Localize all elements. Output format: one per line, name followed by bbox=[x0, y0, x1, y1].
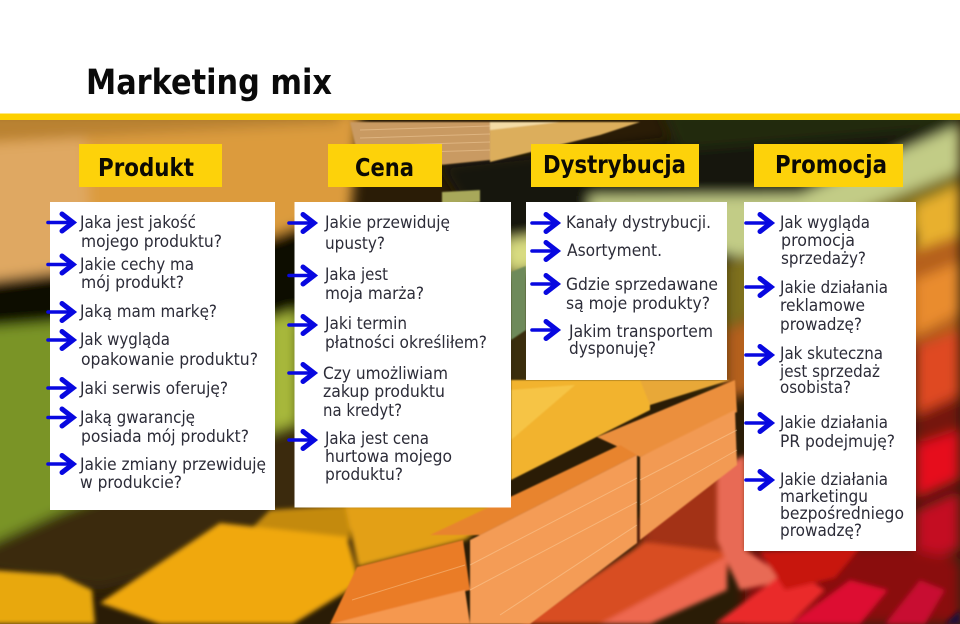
Promocja heading: Promocja bbox=[775, 150, 887, 179]
Dystrybucja question card bbox=[526, 202, 727, 380]
Dystrybucja arrows bbox=[532, 214, 557, 338]
Promocja questions: promocja bbox=[781, 231, 855, 251]
Dystrybucja questions: Gdzie sprzedawane bbox=[566, 275, 718, 295]
Dystrybucja questions bbox=[566, 213, 718, 359]
Cena questions: płatności określiłem? bbox=[325, 333, 487, 353]
Promocja questions: osobista? bbox=[780, 378, 851, 398]
Dystrybucja heading bbox=[531, 144, 699, 187]
Promocja questions bbox=[779, 213, 904, 541]
Promocja questions: Jakie działania bbox=[779, 278, 888, 298]
Produkt heading bbox=[79, 144, 222, 187]
Cena questions: Jakie przewiduję bbox=[324, 213, 450, 233]
Produkt questions: Jaki serwis oferuję? bbox=[79, 379, 228, 399]
Dystrybucja questions: są moje produkty? bbox=[566, 294, 710, 314]
Promocja questions: prowadzę? bbox=[780, 521, 862, 541]
panel: Dystrybucja bbox=[526, 144, 727, 380]
Promocja questions: jest sprzedaż bbox=[779, 362, 880, 382]
Cena questions: Czy umożliwiam bbox=[323, 364, 448, 384]
Promocja questions: Jak skuteczna bbox=[779, 344, 883, 364]
Produkt questions: Jakie cechy ma bbox=[79, 255, 194, 275]
Produkt question card bbox=[50, 202, 275, 510]
Promocja heading bbox=[754, 144, 903, 187]
Produkt questions: opakowanie produktu? bbox=[81, 350, 258, 370]
Dystrybucja questions: Kanały dystrybucji. bbox=[566, 213, 711, 233]
Promocja questions: sprzedaży? bbox=[781, 249, 866, 269]
Cena questions: Jaka jest cena bbox=[324, 429, 429, 449]
panel: Promocja bbox=[744, 144, 916, 551]
Dystrybucja questions: Asortyment. bbox=[567, 241, 662, 261]
top yellow rule bbox=[0, 114, 960, 120]
Produkt questions: Jaka jest jakość bbox=[79, 213, 196, 233]
Produkt questions: posiada mój produkt? bbox=[81, 427, 249, 447]
Dystrybucja questions: Jakim transportem bbox=[568, 322, 713, 342]
Produkt questions: mojego produktu? bbox=[81, 232, 222, 252]
Cena questions: na kredyt? bbox=[323, 401, 402, 421]
Promocja arrows bbox=[746, 214, 771, 488]
Promocja questions: reklamowe bbox=[780, 296, 865, 316]
Promocja questions: PR podejmuję? bbox=[780, 432, 895, 452]
Cena questions bbox=[323, 213, 487, 485]
Cena questions: zakup produktu bbox=[323, 382, 445, 402]
Produkt questions: w produkcie? bbox=[80, 473, 182, 493]
Promocja questions: marketingu bbox=[780, 487, 868, 507]
panel: Cena bbox=[289, 144, 511, 508]
Dystrybucja questions: dysponuję? bbox=[569, 339, 656, 359]
Cena heading bbox=[328, 144, 442, 187]
Promocja questions: prowadzę? bbox=[780, 315, 862, 335]
Produkt questions bbox=[79, 213, 266, 493]
Promocja question card bbox=[744, 202, 916, 551]
Cena heading: Cena bbox=[355, 153, 414, 182]
Produkt arrows bbox=[48, 214, 73, 472]
Produkt questions: Jaką mam markę? bbox=[79, 302, 217, 322]
Produkt questions: Jaką gwarancję bbox=[79, 408, 195, 428]
panel: Produkt bbox=[48, 144, 275, 510]
title: Marketing mix bbox=[86, 63, 332, 103]
Cena questions: moja marża? bbox=[325, 284, 424, 304]
Cena questions: produktu? bbox=[325, 465, 403, 485]
Cena question card bbox=[294, 202, 511, 508]
Produkt questions: Jak wygląda bbox=[79, 330, 170, 350]
Promocja questions: Jakie działania bbox=[779, 413, 888, 433]
Dystrybucja heading: Dystrybucja bbox=[543, 150, 686, 179]
Cena questions: upusty? bbox=[325, 234, 385, 254]
Produkt questions: mój produkt? bbox=[81, 273, 184, 293]
Cena questions: Jaka jest bbox=[324, 265, 388, 285]
Cena arrows bbox=[289, 214, 314, 448]
Cena questions: Jaki termin bbox=[324, 314, 407, 334]
Cena questions: hurtowa mojego bbox=[325, 447, 452, 467]
Produkt heading: Produkt bbox=[98, 153, 194, 182]
Promocja questions: bezpośredniego bbox=[780, 504, 904, 524]
Promocja questions: Jakie działania bbox=[779, 470, 888, 490]
Produkt questions: Jakie zmiany przewiduję bbox=[79, 455, 266, 475]
Promocja questions: Jak wygląda bbox=[779, 213, 870, 233]
